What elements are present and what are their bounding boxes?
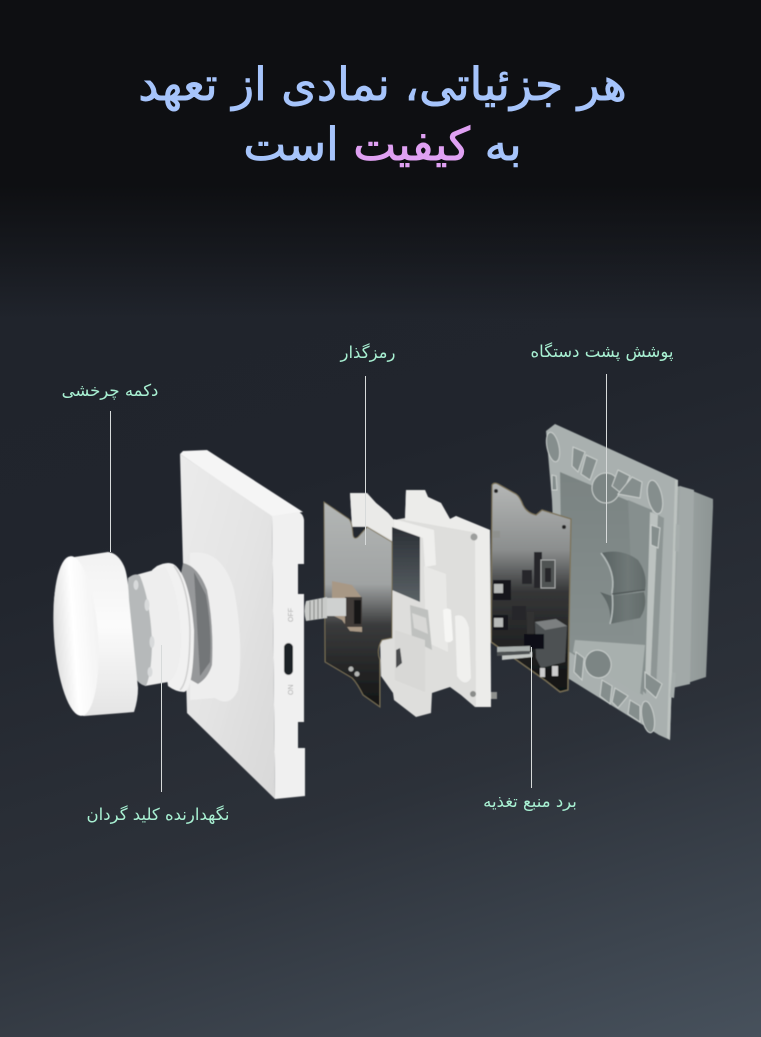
plate ON label: ON <box>288 684 295 695</box>
label: knob retainer: نگهدارنده کلید گردان <box>87 805 229 824</box>
encoder board <box>304 502 392 707</box>
encoder board back screws <box>491 531 500 699</box>
back cover frame <box>546 424 678 740</box>
back cover bottom ribs <box>574 646 662 734</box>
opening <box>176 563 212 684</box>
power board pins <box>497 646 530 652</box>
back cover screw tubes <box>601 552 646 596</box>
holder main body <box>350 490 491 717</box>
leader line: back cover <box>606 374 608 543</box>
leader line: encoder <box>364 376 366 545</box>
plate face <box>180 454 275 799</box>
white holder <box>350 490 491 717</box>
plate top edge <box>180 450 303 517</box>
retainer rear flange <box>152 563 194 692</box>
knob body <box>54 552 138 716</box>
plate collar <box>190 552 240 702</box>
holder display window <box>392 527 420 602</box>
power board relay <box>535 619 567 668</box>
leader line: retainer <box>160 645 162 792</box>
retainer front disc <box>128 574 152 686</box>
encoder shaft <box>304 597 327 621</box>
holder notches <box>470 534 478 540</box>
label: back cover: پوشش پشت دستگاه <box>531 342 673 361</box>
encoder board substrate <box>324 502 392 707</box>
leader line: power board <box>530 647 532 788</box>
rotary knob <box>48 552 138 717</box>
power supply board <box>491 483 571 692</box>
label: power supply board: برد منبع تغذیه <box>483 792 577 811</box>
title: به کیفیت است <box>243 118 522 171</box>
holder clip blocks <box>424 566 448 652</box>
leader line: rotary knob <box>110 411 112 552</box>
title <box>138 58 627 171</box>
plate side edge <box>272 512 305 799</box>
back cover top ribs <box>544 431 665 548</box>
retainer barrel <box>128 567 181 686</box>
encoder rotary component <box>332 581 362 632</box>
power board chips <box>512 552 555 634</box>
plate on-off slot <box>284 643 293 675</box>
label: rotary knob: دکمه چرخشی <box>62 381 158 400</box>
title: هر جزئیاتی، نمادی از تعهد <box>138 58 627 111</box>
power board substrate <box>491 483 571 692</box>
label: encoder: رمزگذار <box>340 343 395 362</box>
plate OFF label: OFF <box>288 608 295 622</box>
back cover recess <box>560 472 650 695</box>
knob face <box>48 555 104 717</box>
back cover <box>544 424 713 740</box>
back cover rear box <box>672 486 713 688</box>
front plate <box>176 450 305 799</box>
knob retainer ring <box>128 563 194 692</box>
